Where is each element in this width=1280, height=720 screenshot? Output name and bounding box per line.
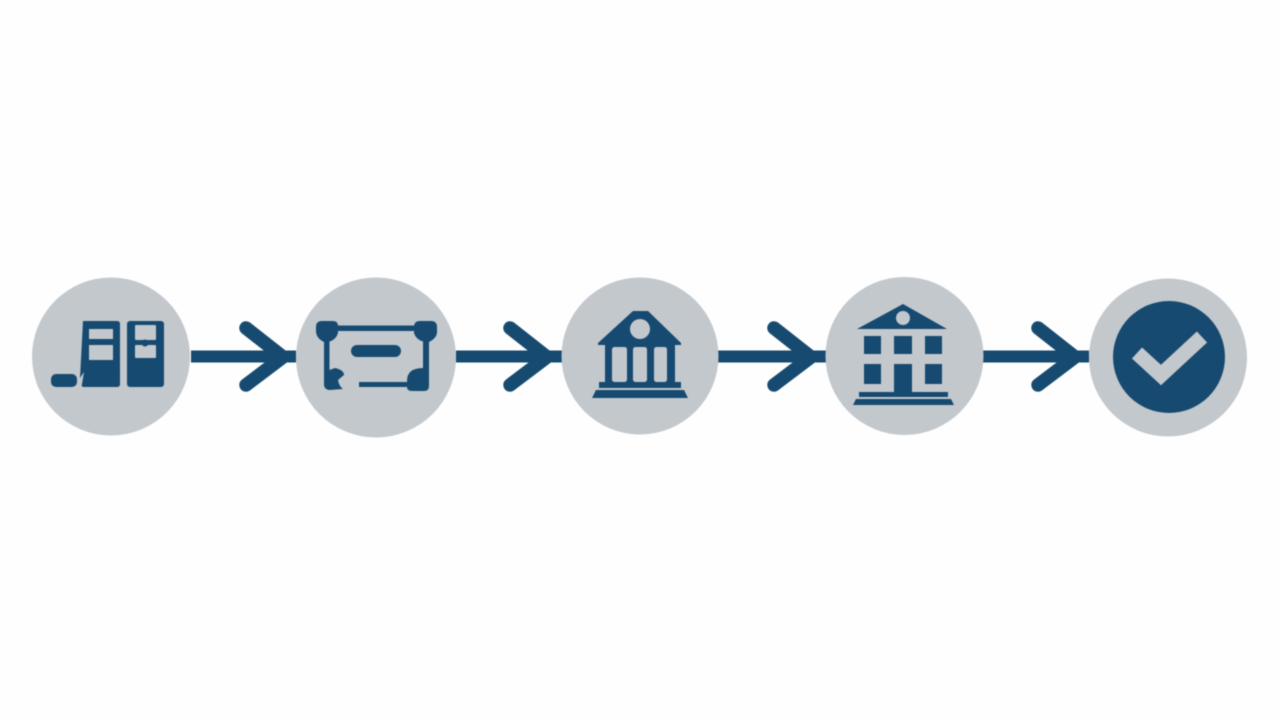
arrow: step 1 to step 2	[191, 328, 296, 385]
step 5: approved	[1089, 278, 1247, 436]
arrow: step 4 to step 5	[983, 328, 1089, 385]
icon: document pair	[51, 321, 164, 387]
arrow: step 2 to step 3	[456, 328, 562, 385]
step 2: contract form	[296, 278, 456, 438]
icon: bank building	[592, 311, 688, 398]
icon: form outline	[316, 321, 437, 391]
arrow: step 3 to step 4	[718, 328, 826, 385]
step 4: multi-window building	[826, 277, 984, 435]
icon: office building	[853, 304, 954, 405]
step 1: documents	[32, 278, 190, 436]
icon: check mark badge	[1113, 301, 1225, 413]
step 3: institution with columns	[562, 278, 718, 434]
